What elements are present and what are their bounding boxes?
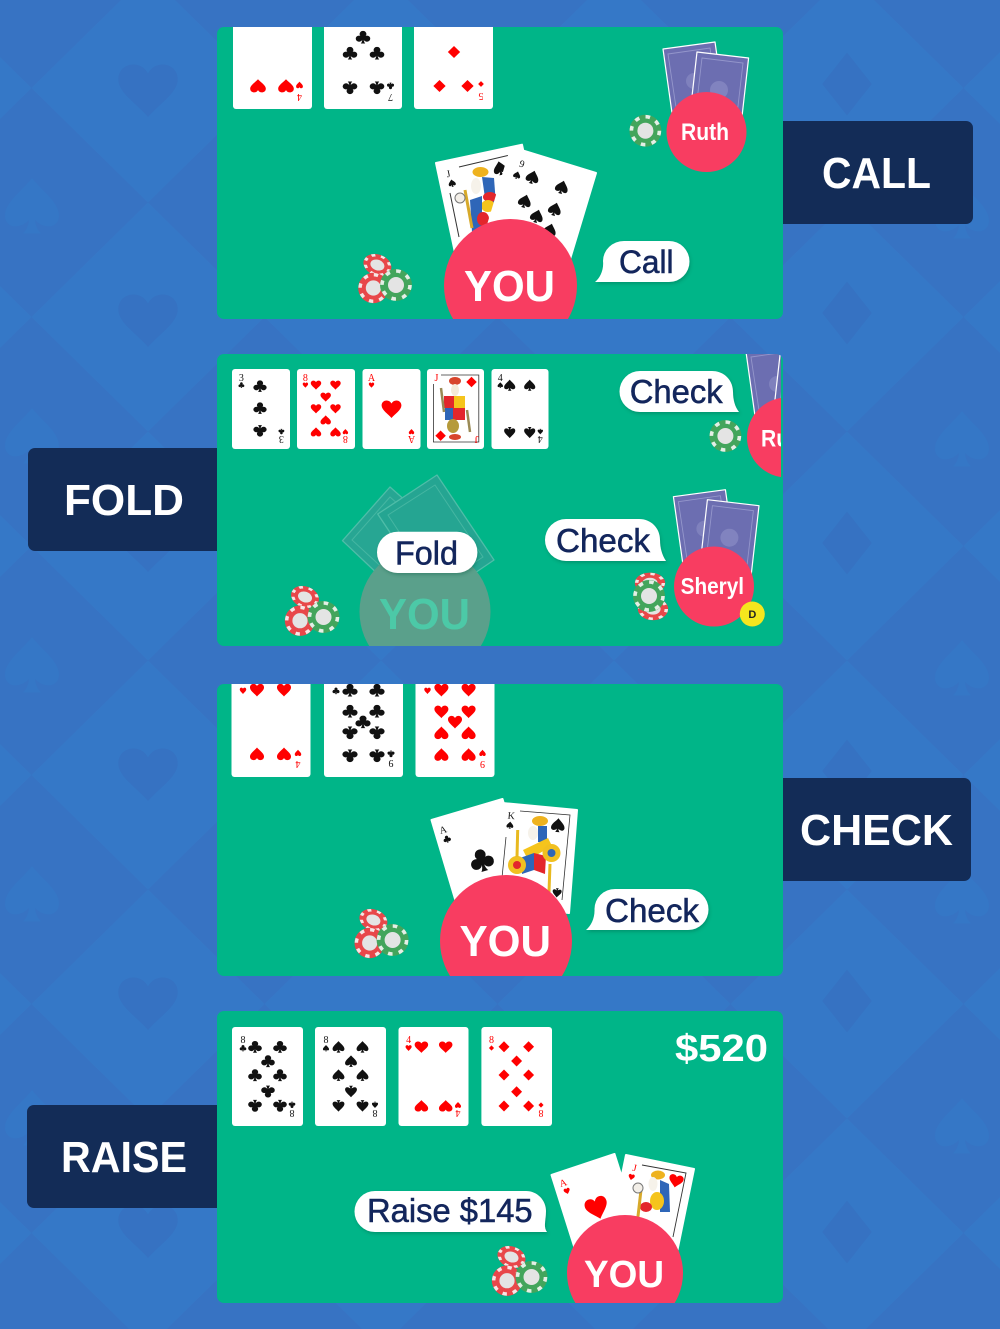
- hole card: ace of hearts: A: [558, 1177, 569, 1190]
- avatar: YOU: [444, 219, 577, 319]
- avatar: Sheryl: [674, 546, 754, 626]
- community card: four of hearts: 4: [296, 758, 300, 769]
- speech bubble: Sheryl checks: [545, 519, 666, 561]
- label: FOLD: [28, 448, 217, 551]
- community card: five of diamonds: 5: [478, 90, 484, 101]
- community card: eight of spades: 8: [324, 1035, 328, 1046]
- speech bubble: Ruth checks: Check: [630, 373, 723, 410]
- hole card: jack of hearts: [607, 1155, 694, 1262]
- community card: four of hearts: [232, 684, 310, 777]
- community card: nine of clubs: [324, 684, 403, 777]
- hole card: jack of hearts: J: [631, 1163, 638, 1174]
- avatar: YOU: YOU: [460, 917, 551, 966]
- hole card: king of spades: K: [507, 811, 516, 822]
- chip: Ruth bet: [709, 420, 741, 452]
- community card: eight of clubs: [232, 1027, 303, 1126]
- community card: eight of hearts: 8: [303, 373, 308, 384]
- community card: jack of diamonds: J: [474, 433, 478, 444]
- community card: four of spades: [492, 369, 548, 449]
- community card: nine of clubs: 9: [388, 757, 394, 768]
- speech bubble: Fold: Fold: [395, 534, 458, 572]
- community card: eight of hearts: [297, 369, 355, 449]
- avatar: YOU faded: [360, 564, 490, 646]
- avatar: YOU: YOU: [584, 1254, 664, 1296]
- panel: raise table: [217, 1011, 783, 1329]
- label: FOLD: FOLD: [64, 476, 184, 525]
- dealer badge: [740, 602, 765, 626]
- community card: seven of clubs: [324, 27, 402, 109]
- player cards and avatar: Ruth: [746, 354, 781, 477]
- pot amount: $520: [675, 1028, 768, 1070]
- player cards and avatar: Ruth: Ruth: [761, 426, 809, 453]
- hole card: nine of spades: [487, 146, 597, 259]
- community card: three of clubs: 3: [279, 433, 284, 444]
- chips: Sheryl stack: [633, 573, 668, 620]
- community card: eight of diamonds: [481, 1027, 552, 1126]
- hole card: jack of spades: J: [445, 169, 452, 180]
- avatar: YOU: [440, 875, 572, 976]
- hole card: ace of clubs: [430, 798, 504, 900]
- folded cards: [342, 474, 495, 572]
- community card: eight of clubs: 8: [240, 1035, 246, 1046]
- speech bubble: Sheryl checks: Check: [556, 522, 650, 559]
- community card: four of hearts: [233, 27, 312, 109]
- community card: nine of hearts: 9: [480, 758, 485, 769]
- community card: three of clubs: 3: [239, 373, 244, 384]
- label: CALL: CALL: [822, 149, 931, 198]
- speech bubble: Check: Check: [605, 892, 699, 929]
- hole card: nine of spades: 9: [518, 159, 526, 171]
- community card: nine of hearts: [416, 684, 494, 777]
- speech bubble: Call: Call: [619, 244, 674, 280]
- label: RAISE: [27, 1105, 217, 1208]
- community card: ace of hearts: A: [407, 433, 415, 444]
- panel: call table: [217, 27, 783, 319]
- hole card: ace of clubs: A: [438, 824, 449, 837]
- community card: eight of clubs: 8: [290, 1107, 294, 1118]
- community card: three of clubs: [232, 369, 290, 449]
- panel: check table: [217, 684, 783, 976]
- community card: four of spades: 4: [538, 433, 543, 444]
- community card: four of hearts: 4: [297, 91, 302, 102]
- chip: Ruth bet: [629, 115, 661, 147]
- community card: four of hearts: [398, 1027, 468, 1126]
- panel: fold table: [217, 354, 783, 646]
- hole card: king of spades: [494, 803, 577, 913]
- community card: four of hearts: 4: [406, 1035, 411, 1046]
- avatar: YOU faded: YOU: [379, 590, 470, 639]
- community card: eight of hearts: 8: [343, 433, 348, 444]
- speech bubble: Fold: [377, 532, 477, 573]
- community card: eight of diamonds: 8: [538, 1107, 544, 1118]
- dealer badge: D: [748, 609, 756, 621]
- chips: your stack: [358, 250, 412, 303]
- community card: seven of clubs: 7: [388, 91, 393, 102]
- speech bubble: Call: [595, 241, 689, 282]
- label: CHECK: CHECK: [800, 806, 953, 855]
- chips: your stack: [492, 1242, 548, 1296]
- label: CHECK: [783, 778, 971, 881]
- speech bubble: Check: [586, 889, 708, 930]
- label: RAISE: RAISE: [61, 1133, 187, 1182]
- community card: ace of hearts: [362, 369, 420, 449]
- label: CALL: [783, 121, 973, 224]
- avatar: Sheryl: Sheryl: [681, 573, 744, 599]
- avatar: Ruth: Ruth: [681, 119, 729, 146]
- avatar: YOU: [567, 1215, 683, 1329]
- player cards: Ruth: [662, 41, 750, 116]
- avatar: YOU: YOU: [464, 262, 555, 311]
- hole card: jack of spades: [435, 144, 524, 252]
- community card: four of spades: 4: [498, 373, 503, 384]
- chips: your stack: [285, 582, 340, 636]
- community card: jack of diamonds: [427, 369, 484, 449]
- community card: jack of diamonds: J: [435, 373, 439, 384]
- community card: ace of hearts: A: [368, 373, 376, 384]
- avatar: Ruth: [666, 92, 746, 172]
- chips: your stack: [354, 905, 409, 958]
- community card: five of diamonds: [414, 27, 493, 109]
- speech bubble: Raise $145: Raise $145: [367, 1192, 533, 1229]
- hole card: ace of hearts: [552, 1154, 643, 1265]
- community card: eight of spades: 8: [372, 1107, 378, 1118]
- player cards: Sheryl: [673, 490, 759, 577]
- community card: four of hearts: 4: [456, 1107, 460, 1118]
- community card: eight of spades: [315, 1027, 386, 1126]
- community card: eight of diamonds: 8: [489, 1035, 494, 1046]
